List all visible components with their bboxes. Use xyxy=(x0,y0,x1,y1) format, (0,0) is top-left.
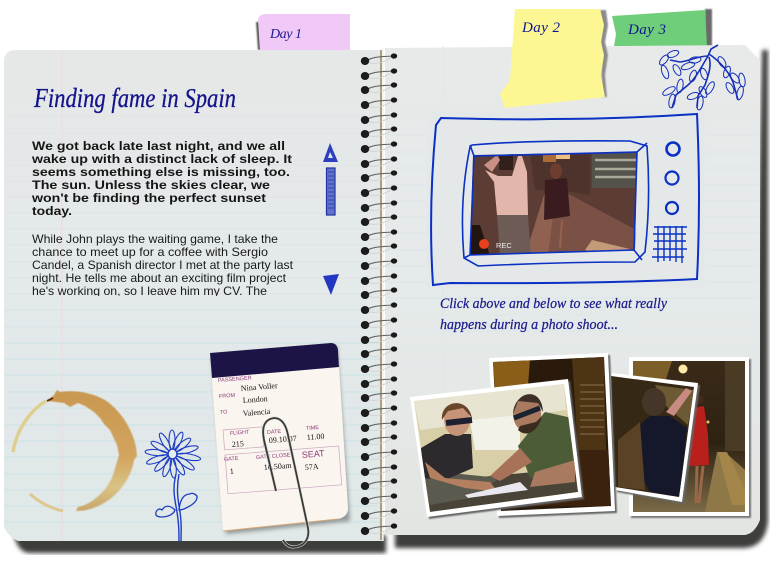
tab: Day 1: Day 1 xyxy=(269,27,302,42)
boarding pass ticket: TO xyxy=(220,409,228,416)
boarding pass ticket: 10.50am xyxy=(263,461,293,472)
tab: Day 2 xyxy=(500,9,608,108)
photo: woman in red in alley xyxy=(629,357,751,518)
intro text block: wake up with a distinct lack of sleep. It xyxy=(31,152,292,166)
boarding pass ticket: 57A xyxy=(304,462,319,472)
photo: dark alley xyxy=(489,353,617,518)
paper clip xyxy=(263,418,308,547)
boarding pass ticket: SEAT xyxy=(301,448,325,460)
boarding pass ticket: FROM xyxy=(219,393,236,400)
heading: Finding fame in Spain xyxy=(33,83,236,113)
body text block: he's working on, so I leave him my CV. The xyxy=(32,284,267,298)
boarding pass ticket: Valencia xyxy=(242,407,271,418)
boarding pass ticket: GATE xyxy=(256,454,271,461)
scroll bar xyxy=(326,168,335,215)
spine xyxy=(381,48,383,541)
boarding pass ticket: 11.00 xyxy=(306,432,325,442)
photo: man from behind xyxy=(611,373,700,504)
boarding pass ticket: 1 xyxy=(229,467,234,476)
flower sketch xyxy=(145,430,201,541)
scroll down arrow xyxy=(323,274,339,295)
body text block: chance to meet up for a coffee with Sergio xyxy=(32,245,268,259)
boarding pass ticket: 215 xyxy=(231,439,244,449)
video still xyxy=(468,150,640,256)
boarding pass ticket: DATE xyxy=(267,429,282,436)
caption xyxy=(440,296,667,333)
video sketch panel xyxy=(426,110,705,288)
tab: Day 3 xyxy=(612,9,712,46)
boarding pass ticket: CLOSE xyxy=(272,452,291,460)
branch sketch xyxy=(658,45,746,110)
coffee ring stain xyxy=(13,390,137,511)
body text block: While John plays the waiting game, I take the xyxy=(32,232,278,246)
boarding pass ticket: PASSENGER xyxy=(218,375,252,384)
caption: happens during a photo shoot... xyxy=(440,317,618,333)
tab: Day 2: Day 2 xyxy=(521,20,560,36)
video still: REC xyxy=(496,241,512,250)
scroll up arrow xyxy=(323,143,338,162)
intro text block: seems something else is missing, too. xyxy=(32,165,290,179)
body text block: night. He tells me about an exciting film project xyxy=(32,271,287,285)
boarding pass ticket: Nina Voller xyxy=(240,381,278,393)
intro text block xyxy=(31,139,292,218)
spiral binding xyxy=(361,53,397,535)
tab: Day 3: Day 3 xyxy=(627,22,666,38)
boarding pass ticket: GATE xyxy=(224,456,239,463)
intro text block: We got back late last night, and we all xyxy=(32,139,285,153)
camera outline sketch xyxy=(431,114,699,285)
boarding pass ticket: TIME xyxy=(306,425,320,432)
photo: couple at table xyxy=(410,379,584,519)
caption: Click above and below to see what really xyxy=(440,296,667,312)
tab: Day 1 xyxy=(256,14,350,52)
intro text block: The sun. Unless the skies clear, we xyxy=(32,178,270,192)
boarding pass ticket xyxy=(210,343,350,534)
left notebook page xyxy=(4,50,383,541)
boarding pass ticket: 09.10.07 xyxy=(268,434,297,445)
body text block: Candel, a Spanish director I met at the party last xyxy=(32,258,294,272)
intro text block: today. xyxy=(32,204,72,218)
boarding pass ticket: London xyxy=(242,394,268,405)
body text block xyxy=(32,232,294,298)
right notebook page xyxy=(385,45,760,535)
boarding pass ticket: FLIGHT xyxy=(230,429,250,437)
intro text block: won't be finding the perfect sunset xyxy=(31,191,266,205)
